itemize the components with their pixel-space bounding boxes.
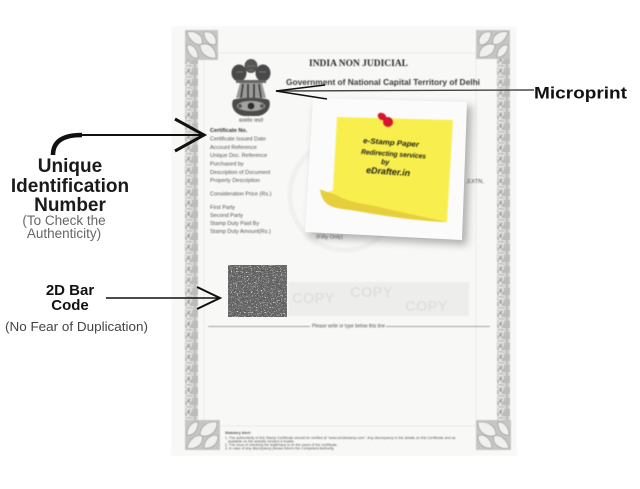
arrow: unique identification number <box>53 119 204 155</box>
certificate field labels: Account Reference <box>210 145 257 151</box>
certificate field labels: Property Description <box>210 178 260 184</box>
certificate field labels: ,EXTN, <box>466 179 484 185</box>
copy watermark band <box>288 282 469 316</box>
icon: national emblem <box>232 59 270 116</box>
statutory alert <box>225 431 456 450</box>
note text: e-Stamp Paper <box>363 136 420 149</box>
note text: eDrafter.in <box>366 165 411 178</box>
certificate field labels: (Fifty Only) <box>316 234 343 240</box>
certificate field labels: First Party <box>210 205 235 211</box>
card shadow <box>309 103 472 245</box>
note text <box>361 136 426 178</box>
sticky note card <box>305 98 472 245</box>
label: Unique Identification Number: Identification <box>11 176 129 197</box>
copy watermark band: COPY <box>292 290 335 307</box>
label: Unique Identification Number <box>11 156 129 216</box>
heading: Government of National Capital Territory of Delhi: Government of National Capital Territory of Delhi <box>286 78 480 87</box>
decorative certificate border <box>185 30 511 450</box>
document: e-stamp certificate <box>171 26 517 456</box>
certificate field labels: Certificate No. <box>210 128 248 134</box>
certificate field labels: Stamp Duty Amount(Rs.) <box>210 229 271 235</box>
certificate field labels: Second Party <box>210 213 243 219</box>
yellow note <box>322 117 453 222</box>
certificate field labels: Certificate Issued Date <box>210 136 266 142</box>
corner ornament: bottom left <box>185 420 220 450</box>
heading: India Non Judicial: INDIA NON JUDICIAL <box>309 58 408 68</box>
copy watermark band: COPY <box>405 298 448 315</box>
note curl <box>320 189 447 222</box>
2D bar code <box>228 265 287 317</box>
statutory alert: 3. In case of any discrepancy please inform the Competent Authority. <box>225 446 334 450</box>
divider with instruction text: Please write or type below this line <box>312 324 385 330</box>
label: 2D Bar Code <box>46 282 94 314</box>
icon: red push pin <box>376 111 393 127</box>
corner ornament: top left <box>185 30 218 60</box>
label: Unique Identification Number: Unique <box>38 156 102 177</box>
copy watermark band: COPY <box>350 284 393 301</box>
arrow: 2D bar code <box>106 287 220 309</box>
note: to check the authenticity <box>22 213 106 241</box>
note: to check the authenticity: Authenticity) <box>27 226 101 241</box>
note text: by <box>381 159 391 167</box>
label: Microprint: Microprint <box>534 84 628 102</box>
label: 2D Bar Code: Code <box>51 297 89 314</box>
statutory alert: available on the website renders it invalid. <box>228 440 295 444</box>
note text: Redirecting services <box>361 149 426 161</box>
statutory alert: 1. The authenticity of this Stamp Certificate should be verified at "www.shcilestamp.com". Any discrepancy in the details on this Certificate and as <box>225 436 456 440</box>
paper sheet <box>171 26 517 456</box>
arrow: microprint <box>276 85 534 99</box>
corner ornament: top right <box>476 30 510 59</box>
statutory alert: Statutory Alert: <box>225 431 251 435</box>
certificate field labels: Consideration Price (Rs.) <box>210 192 272 198</box>
note: no fear of duplication: (No Fear of Duplication) <box>5 319 148 334</box>
corner ornament: bottom right <box>476 420 511 450</box>
emblem motto: सत्यमेव जयते <box>239 117 263 124</box>
label: Unique Identification Number: Number <box>34 195 106 216</box>
watermark seal <box>290 140 400 250</box>
certificate field labels: Stamp Duty Paid By <box>210 221 259 227</box>
certificate field labels: Unique Doc. Reference <box>210 153 267 159</box>
certificate field labels: Description of Document <box>210 170 271 176</box>
statutory alert: 2. The onus of checking the legitimacy is on the users of the certificate. <box>225 443 338 447</box>
label: 2D Bar Code: 2D Bar <box>46 282 94 299</box>
certificate field labels <box>210 128 484 240</box>
certificate field labels: Purchased by <box>210 162 244 168</box>
white card <box>305 98 467 240</box>
note: to check the authenticity: (To Check the <box>22 213 106 228</box>
